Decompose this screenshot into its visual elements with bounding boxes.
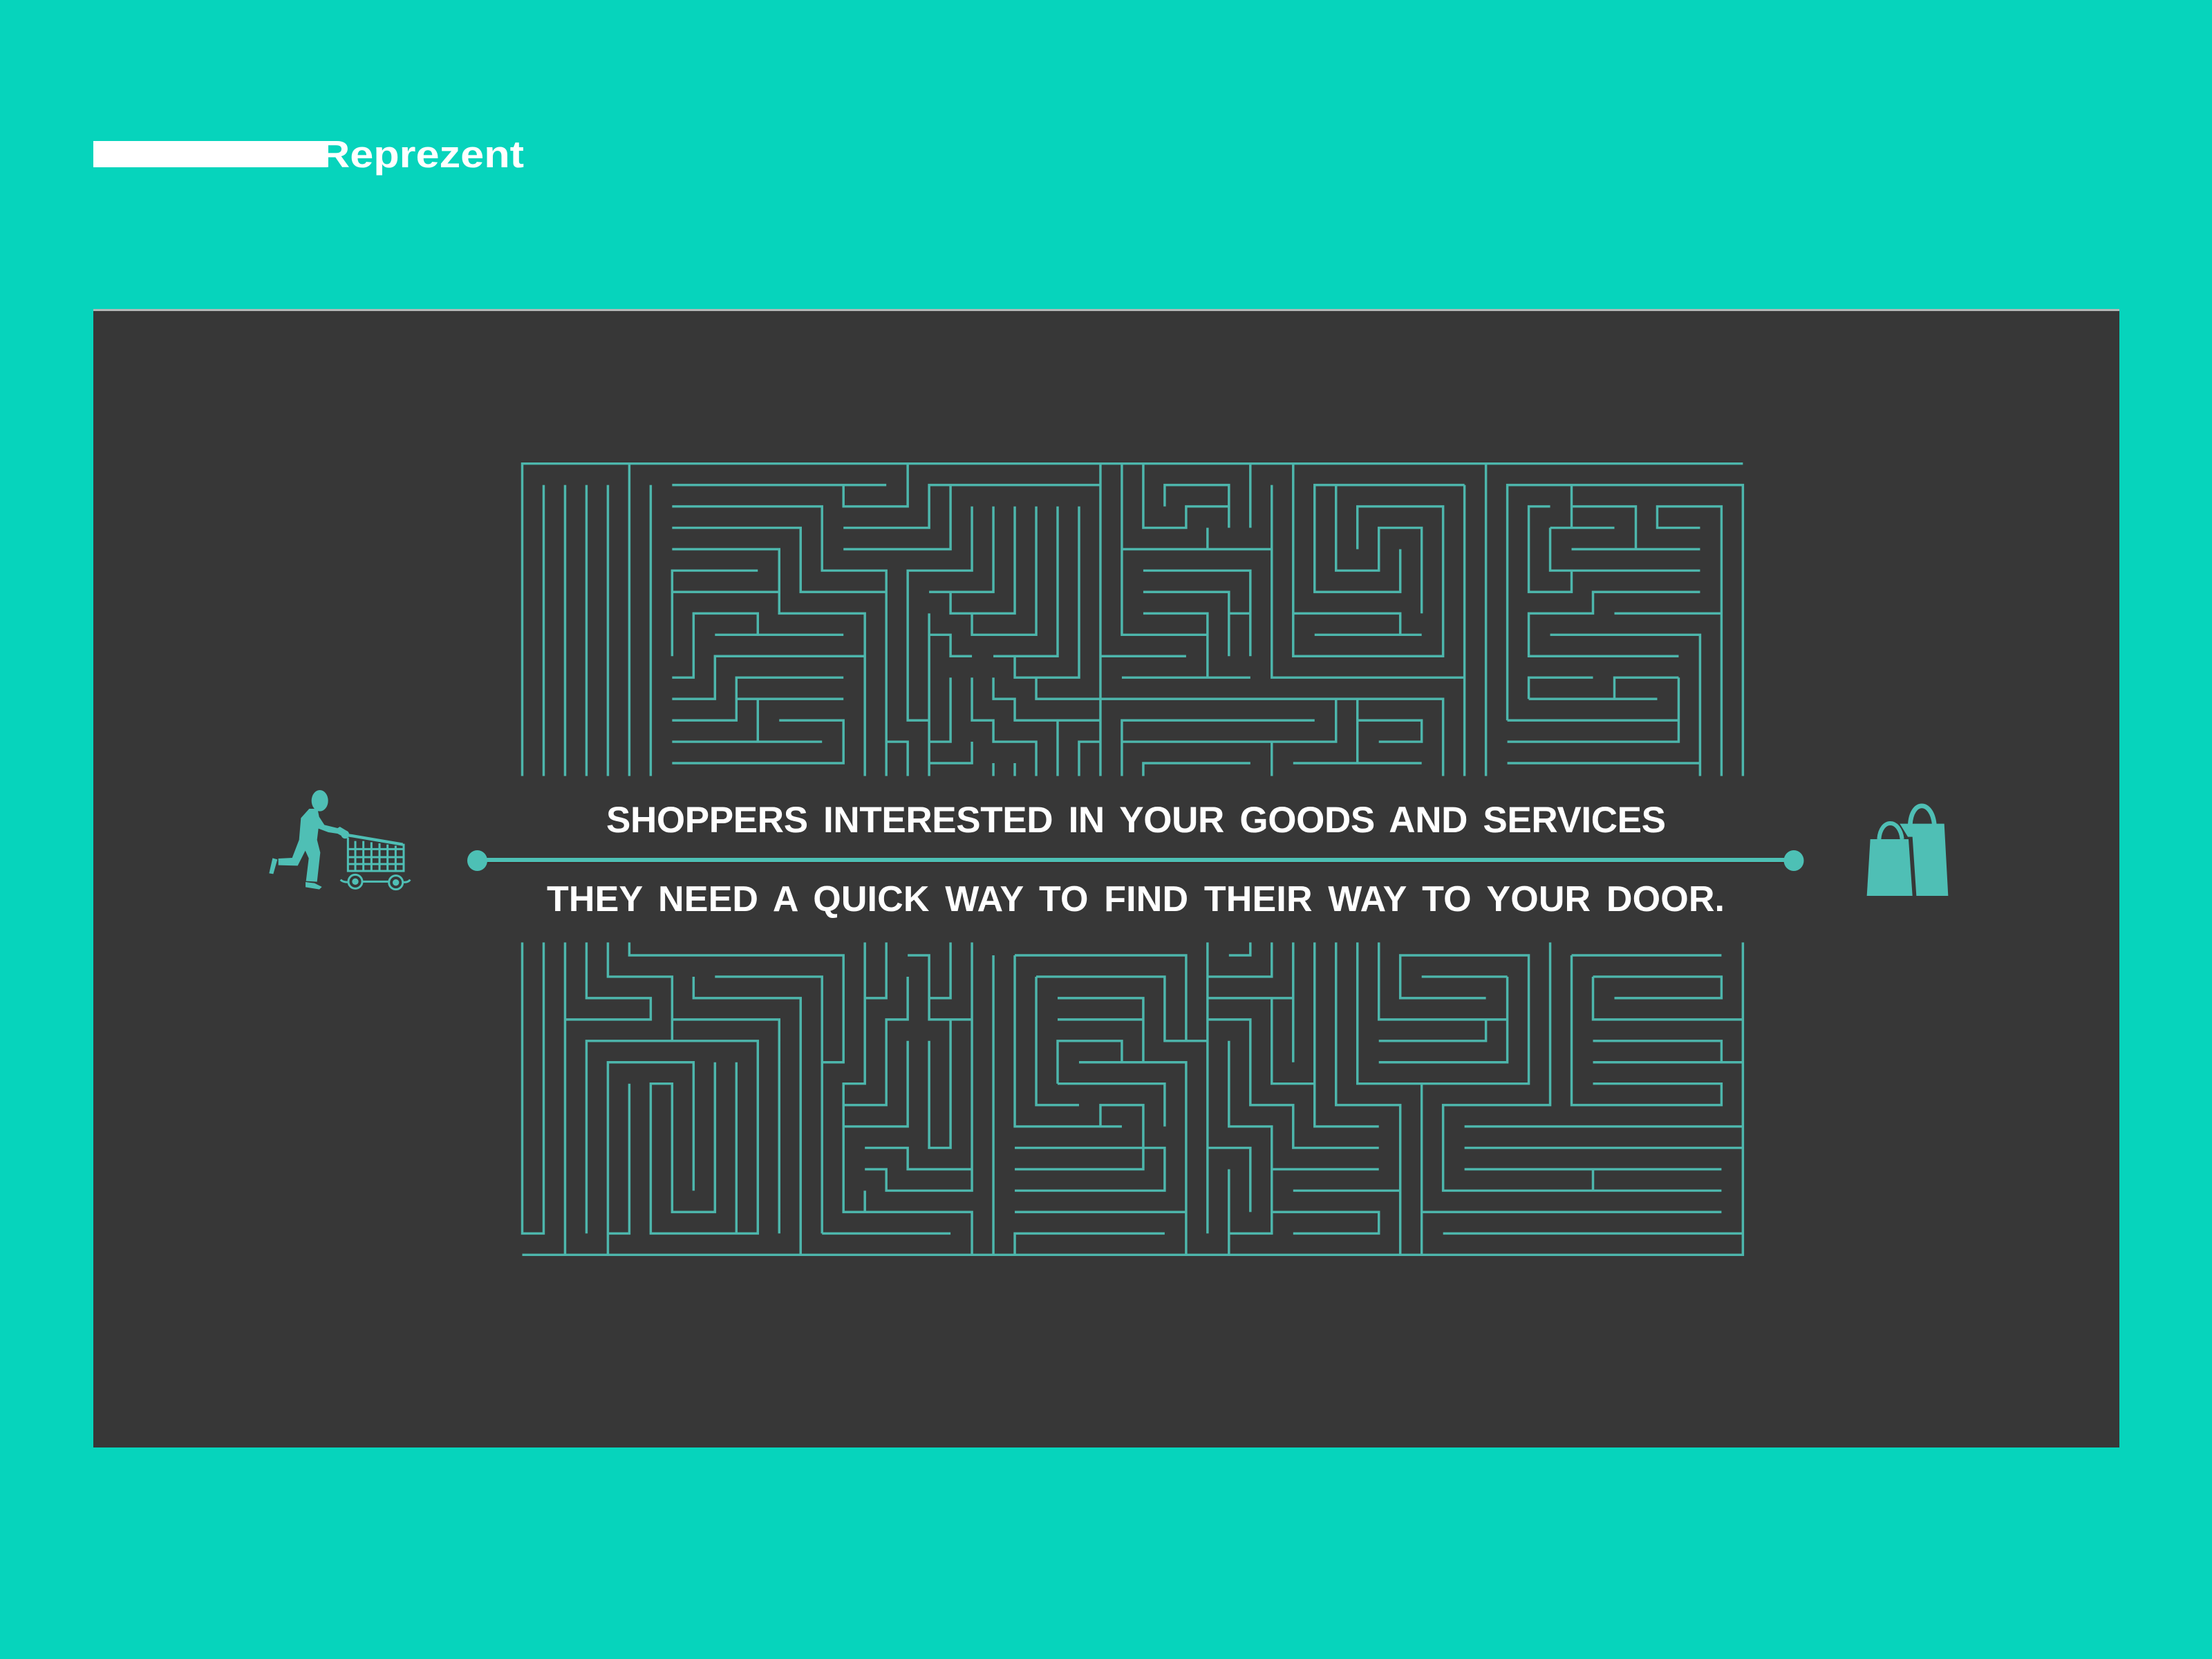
heading: first line: SHOPPERS INTERESTED IN YOUR GOODS AND SERVICES bbox=[606, 800, 1666, 841]
maze: upper block bbox=[523, 464, 1743, 776]
heading: second line: THEY NEED A QUICK WAY TO FIND THEIR WAY TO YOUR DOOR. bbox=[547, 879, 1725, 919]
icon: shopper pushing cart bbox=[269, 790, 410, 890]
logo: Reprezent: Reprezent bbox=[319, 133, 524, 176]
logo: Reprezent bbox=[93, 133, 524, 176]
icon: shopping cart bbox=[341, 832, 410, 890]
icon: shopper figure bbox=[269, 790, 348, 890]
panel: dark background bbox=[93, 309, 2119, 1447]
connector line with end dots bbox=[467, 850, 1804, 871]
icon: shopping bags bbox=[1867, 806, 1948, 896]
maze: lower block bbox=[523, 942, 1743, 1255]
